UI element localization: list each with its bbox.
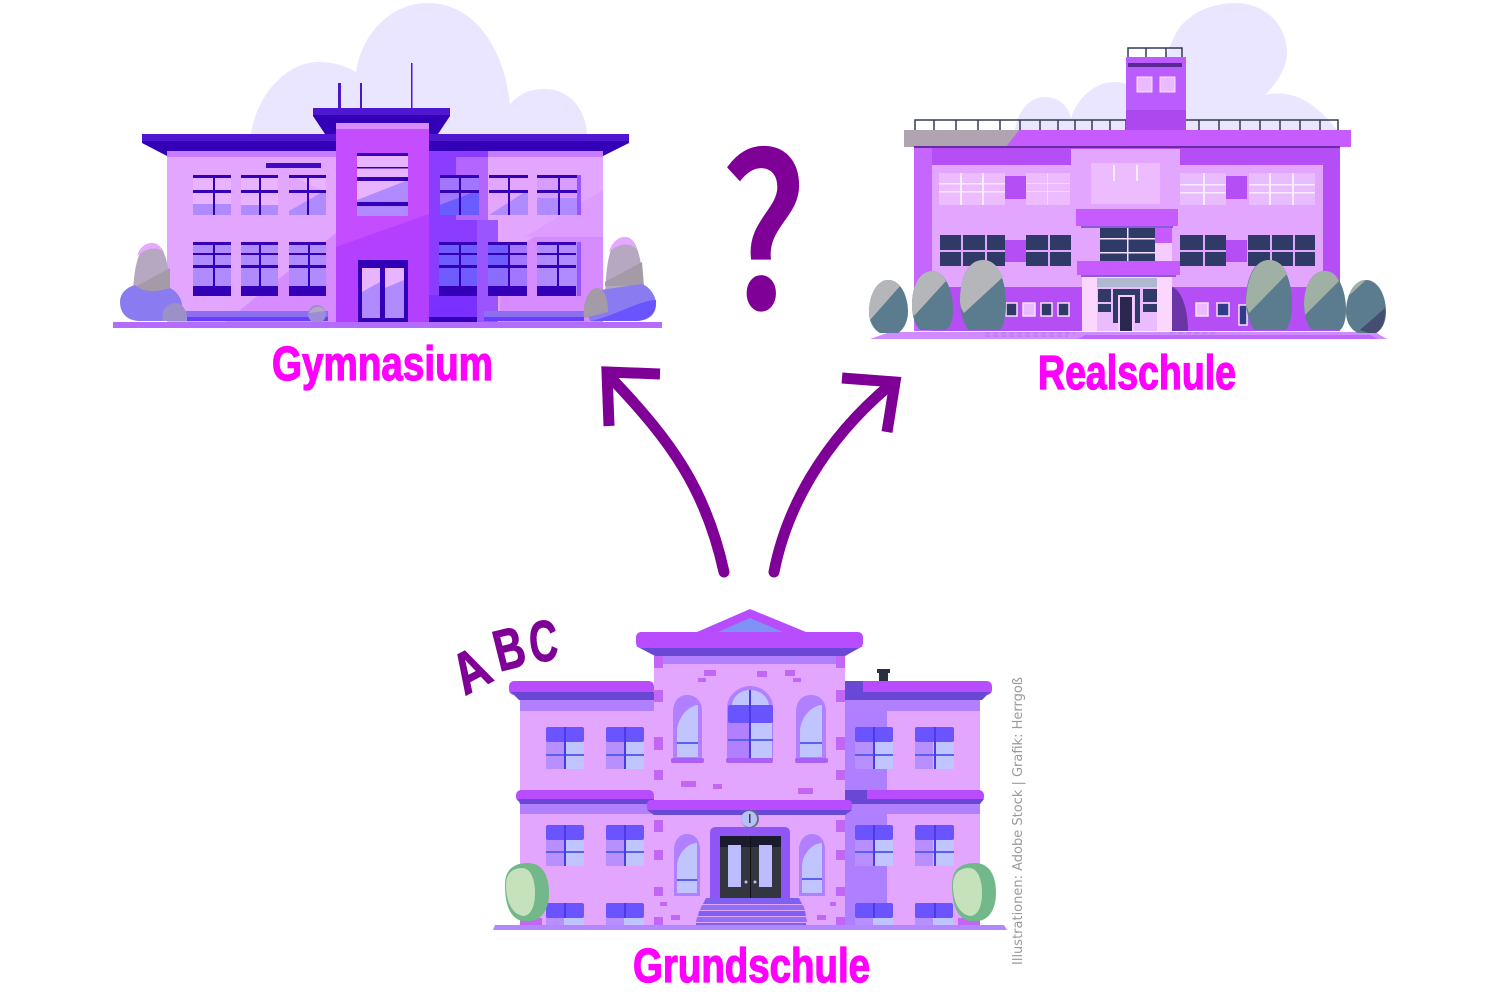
lettering: ABC: A bbox=[441, 635, 501, 708]
tower window bbox=[357, 153, 408, 216]
ground bbox=[493, 925, 1007, 930]
stairs bbox=[696, 898, 807, 925]
ground floor windows bbox=[1006, 303, 1247, 325]
middle cornice bbox=[647, 800, 852, 815]
benches and hedges bbox=[185, 311, 584, 322]
arrow: to Gymnasium bbox=[607, 372, 724, 572]
lower windows bbox=[193, 242, 581, 296]
clock bbox=[741, 810, 759, 828]
left wing bbox=[509, 681, 654, 925]
central block bbox=[654, 656, 845, 925]
label: Grundschule: Grundschule bbox=[633, 940, 870, 993]
building: Realschule bbox=[869, 3, 1387, 339]
credit line: Illustrationen: Adobe Stock | Grafik: Herrgoß bbox=[1010, 677, 1026, 965]
right bushes bbox=[584, 237, 656, 321]
ground bbox=[870, 332, 1387, 339]
left bushes bbox=[120, 243, 326, 323]
entrance bbox=[1082, 277, 1188, 331]
walls bbox=[167, 123, 603, 322]
left trees bbox=[869, 260, 1006, 333]
rooftop railing bbox=[915, 48, 1338, 130]
lettering: ABC: C bbox=[526, 607, 560, 675]
antennas bbox=[338, 63, 412, 109]
middle dark windows bbox=[940, 235, 1315, 266]
building: Grundschule bbox=[493, 609, 1007, 930]
arched windows upper bbox=[671, 686, 828, 763]
corner shading bbox=[520, 918, 980, 925]
building: Gymnasium bbox=[113, 3, 662, 328]
arrow: to Realschule bbox=[774, 378, 895, 572]
entrance door bbox=[358, 260, 408, 322]
lettering: ABC bbox=[441, 607, 560, 708]
question mark: ? bbox=[721, 65, 807, 368]
left bush bbox=[505, 863, 549, 921]
right trees bbox=[1246, 260, 1386, 333]
main body bbox=[914, 147, 1340, 331]
sign bar bbox=[266, 163, 321, 168]
clouds behind Realschule bbox=[1015, 3, 1337, 130]
ground bbox=[113, 322, 662, 328]
pediment bbox=[697, 609, 806, 632]
upper windows bbox=[193, 175, 581, 215]
label: Gymnasium: Gymnasium bbox=[272, 338, 493, 391]
roof bbox=[142, 108, 629, 156]
balcony bbox=[1076, 209, 1180, 277]
right bush bbox=[952, 863, 996, 921]
clouds behind Gymnasium bbox=[251, 3, 587, 134]
right wing bbox=[845, 681, 992, 925]
lettering: ABC: B bbox=[487, 613, 532, 684]
label: Realschule: Realschule bbox=[1038, 347, 1236, 400]
roof slab bbox=[904, 130, 1351, 148]
main door bbox=[710, 827, 790, 898]
wing windows bbox=[546, 727, 954, 925]
top cornice bbox=[636, 632, 863, 656]
arched windows lower bbox=[674, 834, 825, 896]
chimney bbox=[877, 669, 890, 681]
tower bbox=[1126, 57, 1186, 130]
upper glass windows bbox=[939, 163, 1315, 205]
